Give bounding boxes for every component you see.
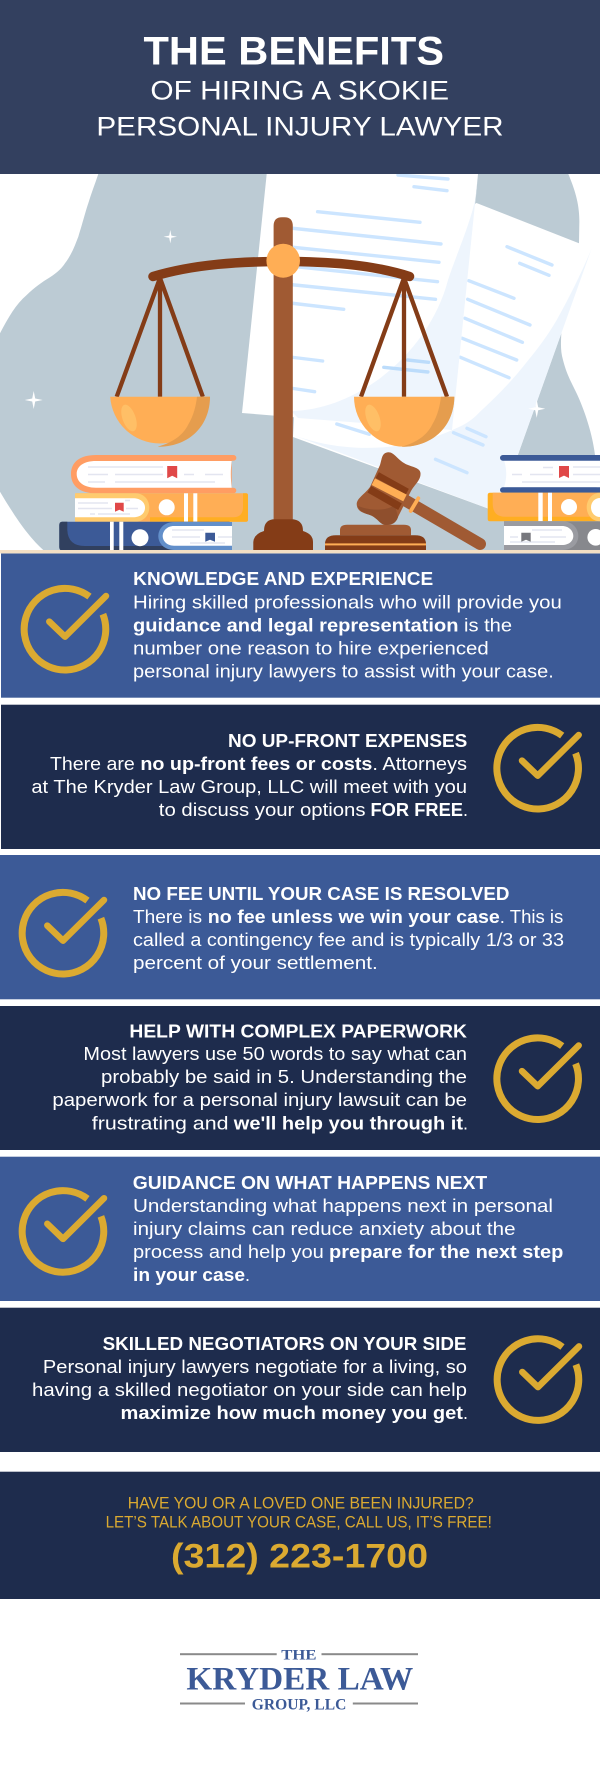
panel: guidance on what happens next	[0, 1157, 600, 1301]
icon: check in circle	[497, 1038, 579, 1119]
body text	[133, 592, 562, 681]
bottom book	[59, 522, 232, 550]
logo: The Kryder Law Group, LLC	[180, 1647, 418, 1713]
body text: .	[245, 1265, 250, 1285]
body text: Personal injury lawyers negotiate for a living, so	[43, 1357, 467, 1377]
icon: check in circle	[24, 588, 106, 670]
call to action text: HAVE YOU OR A LOVED ONE BEEN INJURED?	[128, 1493, 474, 1512]
body text: number one reason to hire experienced	[133, 638, 489, 658]
body text: . This is	[500, 907, 563, 927]
header banner	[0, 0, 600, 174]
body text: at The Kryder Law Group, LLC will meet with you	[31, 777, 467, 797]
top book	[71, 455, 236, 493]
illustration: scales, gavel, books and papers	[0, 174, 600, 553]
icon: check in circle	[22, 1191, 104, 1272]
body text: .	[463, 1113, 468, 1133]
logo: The Kryder Law Group, LLC: GROUP, LLC	[252, 1696, 346, 1713]
body text: prepare for the next step	[329, 1242, 563, 1262]
right pan	[354, 278, 454, 447]
body text: .	[463, 1403, 468, 1423]
body text: Hiring skilled professionals who will provide you	[133, 592, 562, 612]
body text: frustrating and	[92, 1113, 228, 1133]
background blob	[0, 174, 600, 550]
scale pivot	[266, 244, 300, 278]
heading: NO FEE UNTIL YOUR CASE IS RESOLVED	[133, 884, 509, 904]
subtitle line two: PERSONAL INJURY LAWYER	[96, 112, 504, 142]
body text: is the	[464, 615, 512, 635]
gavel	[325, 452, 480, 550]
body text	[133, 1196, 563, 1285]
body text: in your case	[133, 1265, 245, 1285]
panel: no up-front expenses	[1, 705, 600, 849]
left pan	[110, 278, 210, 447]
panel: skilled negotiators	[0, 1308, 600, 1452]
document front	[242, 174, 478, 430]
body text: Understanding what happens next in personal	[133, 1196, 553, 1216]
body text: we'll help you through it	[233, 1113, 463, 1133]
body text: FOR FREE	[370, 800, 463, 820]
icon: check in circle	[22, 892, 104, 974]
top book	[500, 455, 600, 493]
panel: no fee until resolved	[0, 855, 600, 999]
body text: to discuss your options	[159, 800, 366, 820]
body text	[52, 1044, 468, 1133]
phone number: (312) 223-1700	[171, 1537, 428, 1575]
heading: NO UP-FRONT EXPENSES	[228, 731, 467, 751]
body text: maximize how much money you get	[120, 1403, 463, 1423]
scale beam	[153, 262, 410, 276]
body text: . Attorneys	[372, 754, 467, 774]
body text: There are	[50, 754, 135, 774]
body text: no fee unless we win your case	[208, 907, 500, 927]
call to action text	[106, 1493, 492, 1531]
sparkles	[25, 230, 545, 418]
scale pole	[253, 217, 313, 550]
body text: having a skilled negotiator on your side can help	[32, 1380, 467, 1400]
icon: check in circle	[497, 727, 579, 809]
body text: process and help you	[133, 1242, 324, 1262]
title: THE BENEFITS	[144, 29, 444, 73]
heading: SKILLED NEGOTIATORS ON YOUR SIDE	[103, 1334, 466, 1354]
heading: GUIDANCE ON WHAT HAPPENS NEXT	[133, 1173, 487, 1193]
body text: Most lawyers use 50 words to say what can	[83, 1044, 467, 1064]
shelf	[0, 550, 600, 553]
panel: knowledge and experience	[1, 554, 600, 698]
middle book	[488, 493, 600, 521]
body text: paperwork for a personal injury lawsuit can be	[52, 1090, 467, 1110]
logo: The Kryder Law Group, LLC: THE	[281, 1647, 316, 1663]
icon: check in circle	[497, 1339, 579, 1420]
logo: The Kryder Law Group, LLC: KRYDER LAW	[186, 1661, 413, 1697]
bottom book	[504, 521, 600, 550]
panel: help with complex paperwork	[0, 1006, 600, 1150]
right book stack	[488, 455, 600, 550]
body text: guidance and legal representation	[133, 615, 458, 635]
body text: called a contingency fee and is typically 1/3 or 33	[133, 930, 564, 950]
left book stack	[59, 455, 248, 550]
body text: There is	[133, 907, 202, 927]
body text: .	[463, 800, 468, 820]
call to action panel	[0, 1472, 600, 1599]
body text: probably be said in 5. Understanding the	[101, 1067, 467, 1087]
middle book	[75, 493, 248, 522]
subtitle line one: OF HIRING A SKOKIE	[150, 75, 449, 105]
body text	[31, 754, 468, 820]
body text: personal injury lawyers to assist with your case.	[133, 661, 554, 681]
body text	[133, 907, 564, 973]
heading: HELP WITH COMPLEX PAPERWORK	[129, 1021, 467, 1041]
body text: no up-front fees or costs	[140, 754, 372, 774]
body text: percent of your settlement.	[133, 953, 378, 973]
document back	[293, 203, 592, 512]
body text	[32, 1357, 468, 1423]
call to action text: LET’S TALK ABOUT YOUR CASE, CALL US, IT’S FREE!	[106, 1512, 492, 1531]
body text: injury claims can reduce anxiety about the	[133, 1219, 516, 1239]
heading: KNOWLEDGE AND EXPERIENCE	[133, 569, 433, 589]
